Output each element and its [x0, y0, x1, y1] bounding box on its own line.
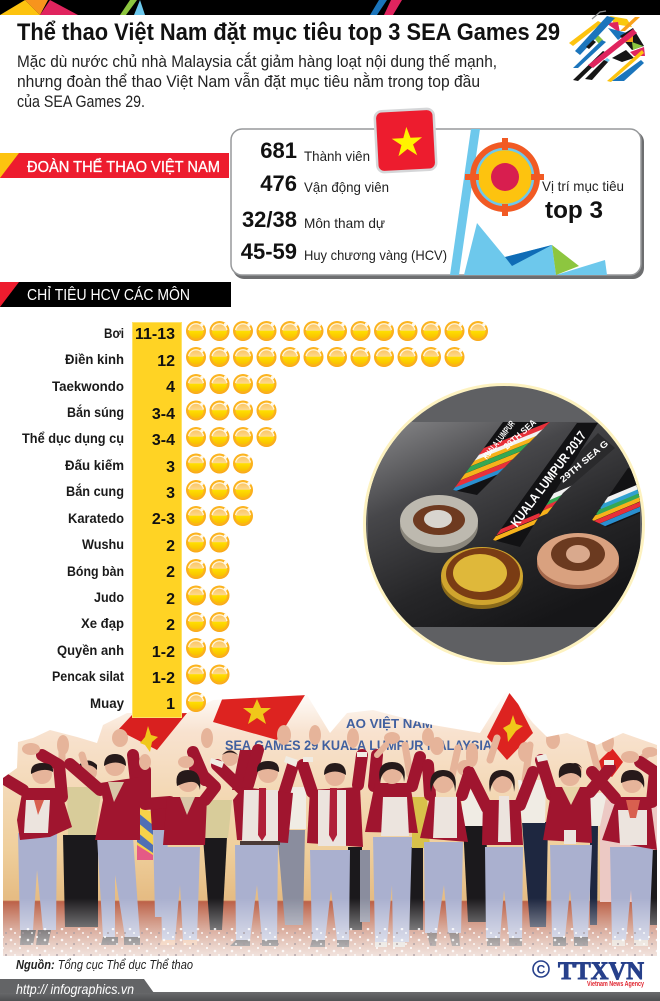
team member 3: [139, 754, 215, 945]
row: Bắn cung: [66, 480, 253, 502]
photo: SEA Games medals: [360, 380, 660, 670]
icon: SEA Games 29 logo: [569, 11, 645, 82]
panel: delegation stats: [231, 129, 644, 279]
flag: centre: [213, 695, 305, 740]
row: Wushu: 2: [166, 538, 175, 555]
row: Đấu kiếm: 3: [166, 459, 175, 476]
row: Muay: Muay: [90, 696, 124, 711]
intro text: nhưng đoàn thể thao Việt Nam vẫn đặt mục tiêu nằm trong top đầu: [17, 72, 480, 91]
row: Muay: [90, 692, 206, 713]
row: Thể dục dụng cụ: 3-4: [152, 432, 175, 449]
stat: gold medals: 45-59: [241, 239, 297, 264]
row: Taekwondo: 4: [166, 379, 175, 396]
stat: athletes: [260, 171, 389, 196]
row: Thể dục dụng cụ: Thể dục dụng cụ: [22, 431, 124, 446]
ribbon lettering: 29TH SEA G: [558, 438, 610, 485]
row: Quyền anh: [57, 638, 230, 661]
team member 7: [420, 737, 478, 946]
row: Judo: Judo: [94, 590, 124, 605]
row: Karatedo: 2-3: [152, 511, 175, 528]
stage backdrop details: [137, 716, 657, 902]
stat: members: 681: [260, 138, 297, 163]
flag: far right: [599, 748, 623, 777]
banner: Đoàn thể thao Việt Nam: [0, 153, 229, 178]
row: Điền kinh: Điền kinh: [65, 352, 124, 367]
ribbon lettering: 29TH SEA: [502, 417, 538, 451]
stat: sports: Môn tham dự: [304, 215, 385, 231]
gold medal: [441, 547, 523, 609]
row: Wushu: [82, 532, 230, 555]
intro text: [17, 52, 497, 111]
row: Bắn súng: Bắn súng: [67, 405, 124, 420]
target label: [542, 178, 624, 224]
row: Karatedo: Karatedo: [68, 511, 124, 526]
row: Xe đạp: Xe đạp: [81, 616, 124, 631]
ribbon: silver medal: [453, 422, 550, 495]
title: Thể thao Việt Nam đặt mục tiêu top 3 SEA Games 29: [17, 19, 560, 46]
team member 1: [3, 743, 72, 945]
ribbon: gold medal: [493, 423, 598, 547]
row: Xe đạp: [81, 612, 230, 634]
stat: athletes: Vận động viên: [304, 179, 389, 195]
team member 5: [303, 725, 367, 947]
logo: TTXVN: [533, 958, 644, 988]
row: Taekwondo: [52, 374, 276, 396]
team member 6: [365, 728, 434, 947]
icon: Vietnam flag: [374, 108, 437, 172]
stat: sports: 32/38: [242, 207, 297, 232]
stat: gold medals: Huy chương vàng (HCV): [304, 247, 447, 263]
footer bar with website: [0, 979, 660, 1001]
team member 9: [536, 731, 614, 946]
ribbon: bronze medal: [592, 468, 640, 527]
stage backdrop details: SEA GAMES 29 KUALA LUMPUR MALAYSIA: [225, 737, 492, 753]
intro text: Mặc dù nước chủ nhà Malaysia cắt giảm hàng loạt nội dung thế mạnh,: [17, 52, 497, 71]
row: Judo: 2: [166, 591, 175, 608]
silver medal: [400, 495, 478, 553]
yellow value column: [132, 322, 182, 718]
logo: TTXVN: Vietnam News Agency: [587, 981, 644, 988]
row: Bắn cung: Bắn cung: [66, 484, 124, 499]
stat: members: [260, 138, 370, 164]
banner: Đoàn thể thao Việt Nam: ĐOÀN THỂ THAO VIỆT NAM: [27, 157, 220, 176]
row: Karatedo: [68, 506, 253, 528]
logo: TTXVN: TTXVN: [558, 958, 644, 985]
row: Wushu: Wushu: [82, 537, 124, 552]
stage backdrop details: AO VIỆT NAM: [346, 716, 433, 731]
row: Xe đạp: 2: [166, 617, 175, 634]
row: Quyền anh: 1-2: [152, 644, 175, 661]
top decorative bar: [0, 0, 660, 15]
row: Bơi: 11-13: [135, 326, 175, 343]
flag: left: [118, 713, 187, 752]
background people: [62, 738, 657, 930]
intro text: của SEA Games 29.: [17, 92, 145, 111]
row: Bóng bàn: Bóng bàn: [67, 564, 124, 579]
banner: Chỉ tiêu HCV các môn: CHỈ TIÊU HCV CÁC MÔN: [27, 285, 190, 304]
row: Đấu kiếm: Đấu kiếm: [65, 458, 124, 473]
target label: top 3: [545, 197, 603, 224]
row: Taekwondo: Taekwondo: [52, 379, 124, 394]
stat: sports: [242, 207, 385, 232]
team member 2: [57, 729, 140, 945]
row: Đấu kiếm: [65, 454, 253, 476]
row: Bóng bàn: 2: [166, 564, 175, 581]
target label: Vị trí mục tiêu: [542, 178, 624, 194]
ribbon: second strap behind: [538, 433, 614, 518]
photo: team on stage: [3, 690, 658, 956]
confetti fade: [3, 898, 657, 956]
row: Bắn súng: 3-4: [152, 406, 175, 423]
banner: Chỉ tiêu HCV các môn: [0, 282, 231, 307]
stat: gold medals: [241, 239, 447, 264]
row: Pencak silat: [52, 664, 230, 687]
team member 10: [592, 747, 658, 946]
row: Muay: 1: [166, 696, 175, 713]
icon: target: [465, 138, 544, 216]
row: Bóng bàn: [67, 559, 230, 581]
row: Thể dục dụng cụ: [22, 427, 276, 449]
row: Điền kinh: [65, 347, 464, 370]
decoration: blue stripe and mountains: [450, 129, 607, 275]
team member 4: [201, 725, 298, 946]
logo: TTXVN: C: [537, 962, 546, 976]
row: Quyền anh: Quyền anh: [57, 643, 124, 658]
row: Điền kinh: 12: [157, 353, 175, 370]
row: Pencak silat: 1-2: [152, 670, 175, 687]
row: Judo: [94, 586, 230, 608]
row: Bơi: Bơi: [104, 326, 124, 341]
ribbon lettering: KUALA LUMPUR: [481, 419, 517, 461]
stat: athletes: 476: [260, 171, 297, 196]
source note: Nguồn: Tổng cục Thể dục Thể thao: [16, 957, 193, 972]
row: Bắn súng: [67, 400, 276, 423]
bronze medal: [537, 533, 619, 589]
ribbon lettering: KUALA LUMPUR 2017: [507, 428, 589, 530]
row: Pencak silat: Pencak silat: [52, 669, 124, 684]
row: Bơi: [104, 321, 488, 343]
footer bar with website: http:// infographics.vn: [16, 981, 134, 997]
team member 8: [466, 742, 533, 946]
chart: gold medal targets by sport: [22, 321, 488, 718]
row: Bắn cung: 3: [166, 485, 175, 502]
stat: members: Thành viên: [304, 148, 370, 164]
flag: right: [487, 690, 533, 760]
